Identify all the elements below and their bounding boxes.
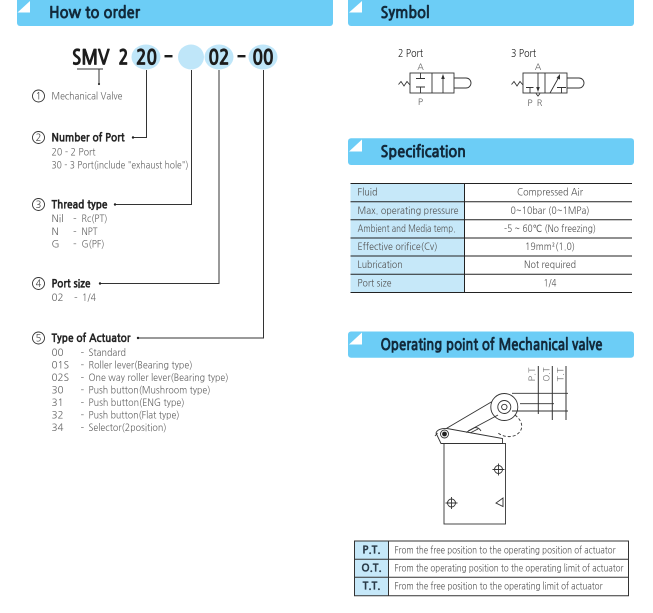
symbol: 2 Port <box>398 48 471 107</box>
item 5: Type of Actuator: Push button(Flat type) <box>88 410 180 420</box>
item 4: Port size <box>32 278 96 303</box>
item 5: Type of Actuator: Push button(ENG type) <box>88 397 184 408</box>
code segment highlights <box>132 44 278 70</box>
item 3: Thread type: G(PF) <box>82 238 104 250</box>
row: Max. operating pressure: 0~10bar (0~1MPa) <box>510 205 590 216</box>
item 3: Thread type: NPT <box>82 227 98 237</box>
valve body <box>444 444 506 524</box>
header: How to order <box>17 0 333 26</box>
symbol: 3 Port: 3 Port <box>511 48 536 59</box>
specification table <box>350 184 632 292</box>
item 5: Type of Actuator: Type of Actuator <box>52 333 131 344</box>
item 5: Type of Actuator: Standard <box>88 347 126 358</box>
item 4: Port size: 4 <box>36 280 42 289</box>
row: Port size: Port size <box>358 278 392 288</box>
item 4: Port size: 1/4 <box>82 293 96 303</box>
row: T.T.: T.T. <box>363 580 380 592</box>
symbol: 3 Port: P <box>527 99 533 108</box>
row: Effective orifice <box>358 241 575 252</box>
item 3: Thread type: G <box>52 240 59 250</box>
item 2: Number of Port: 20 - 2 Port <box>52 148 96 158</box>
code text: 2 <box>118 48 128 68</box>
item 1: Mechanical Valve <box>32 90 123 102</box>
header: Specification: Specification <box>380 144 466 160</box>
item 5: Type of Actuator: 32 <box>52 410 64 420</box>
header: Symbol: Symbol <box>380 5 430 21</box>
item 2: Number of Port: Number of Port <box>52 132 125 144</box>
header: Specification <box>348 138 634 165</box>
row: Effective orifice: Effective orifice(Cv) <box>358 241 438 252</box>
measurement lines <box>512 393 568 411</box>
code text: 00 <box>252 48 274 68</box>
item 4: Port size: 02 <box>52 293 64 303</box>
row: Lubrication: Not required <box>524 259 576 270</box>
item 5: Type of Actuator: 31 <box>52 398 64 408</box>
item 5: Type of Actuator: 02S <box>52 373 69 383</box>
diagram: mechanical valve operating points <box>435 366 568 524</box>
item 2: Number of Port <box>32 132 188 170</box>
item 5: Type of Actuator: - <box>80 423 84 433</box>
label: O.T: O.T <box>542 367 552 382</box>
symbol: 2 Port: P <box>418 98 423 107</box>
item 2: Number of Port: 2 <box>36 134 41 143</box>
row: Lubrication <box>358 259 576 270</box>
item 3: Thread type: Nil <box>52 213 64 224</box>
mounting marks <box>446 464 504 509</box>
row: Port size: 1/4 <box>544 278 556 288</box>
row: Max. operating pressure <box>358 205 590 216</box>
item 3: Thread type: 3 <box>36 201 41 210</box>
item 3: Thread type: Rc(PT) <box>82 213 108 224</box>
row: Ambient and Media temp.: -5 ~ 60℃ (No freezing) <box>504 223 596 234</box>
row: Fluid: Fluid <box>358 186 378 198</box>
item 5: Type of Actuator: - <box>80 398 84 408</box>
row: T.T. <box>363 580 603 592</box>
row: Max. operating pressure: Max. operating pressure <box>358 206 459 216</box>
header: Operating point of Mechanical valve <box>348 332 634 358</box>
label: T.T: T.T <box>556 367 566 382</box>
item 4: Port size: Port size <box>52 278 90 290</box>
label: P.T: P.T <box>528 367 537 382</box>
legend table: travel definitions <box>354 541 628 596</box>
header: Symbol <box>348 0 634 26</box>
item 5: Type of Actuator: - <box>80 360 84 370</box>
code text: SMV <box>72 48 110 68</box>
actuator lever and roller <box>435 394 522 444</box>
item 3: Thread type: - <box>73 240 77 250</box>
item 4: Port size: - <box>74 293 78 303</box>
header: Operating point of Mechanical valve: Operating point of Mechanical valve <box>380 337 603 353</box>
row: T.T.: From the free position to the operating limit of actuator <box>394 580 603 592</box>
item 3: Thread type: N <box>52 227 59 237</box>
row: Effective orifice: 19mm²(1.0) <box>525 241 575 252</box>
item 5: Type of Actuator: Roller lever(Bearing type) <box>88 360 192 370</box>
row: Fluid: Compressed Air <box>517 186 583 198</box>
row: P.T.: P.T. <box>362 544 381 556</box>
code text <box>72 48 274 68</box>
item 5: Type of Actuator: - <box>80 386 84 396</box>
item 1: Mechanical Valve: 1 <box>36 92 41 102</box>
symbol: 2 Port: 2 Port <box>398 48 423 59</box>
item 3: Thread type: Thread type <box>52 200 108 210</box>
item 3: Thread type: - <box>73 227 77 237</box>
item 3: Thread type <box>32 198 108 250</box>
leader lines <box>77 69 264 339</box>
item 5: Type of Actuator: 01S <box>52 360 69 370</box>
item 5: Type of Actuator: 34 <box>52 423 64 433</box>
code text: 02 <box>208 48 230 68</box>
header: How to order: How to order <box>49 5 140 21</box>
symbol: 3 Port <box>511 48 584 108</box>
symbol: 3 Port: R <box>537 99 543 108</box>
row: O.T.: O.T. <box>361 562 382 574</box>
item 5: Type of Actuator: 30 <box>52 386 64 396</box>
item 5: Type of Actuator: - <box>80 373 84 383</box>
item 5: Type of Actuator: - <box>80 348 84 358</box>
symbol: 2 Port: A <box>417 63 424 72</box>
item 5: Type of Actuator: 00 <box>52 348 64 358</box>
item 5: Type of Actuator: Push button(Mushroom type) <box>88 384 210 396</box>
item 1: Mechanical Valve: Mechanical Valve <box>52 90 123 102</box>
row: Ambient and Media temp.: Ambient and Media temp. <box>358 223 456 234</box>
item 5: Type of Actuator: 5 <box>36 334 42 344</box>
row: Port size <box>358 278 556 288</box>
item 5: Type of Actuator <box>32 332 228 433</box>
symbol: 3 Port: A <box>535 63 542 72</box>
item 2: Number of Port: 30 - 3 Port(include "exhaust hole") <box>52 160 188 170</box>
item 3: Thread type: - <box>73 214 77 224</box>
item 5: Type of Actuator: One way roller lever(Bearing type) <box>88 372 228 383</box>
order code <box>72 44 278 70</box>
row: Ambient and Media temp. <box>358 223 596 234</box>
code text: 20 <box>136 48 157 68</box>
item 5: Type of Actuator: Selector(2position) <box>88 422 166 433</box>
item 5: Type of Actuator: - <box>80 410 84 420</box>
row: Lubrication: Lubrication <box>358 259 402 270</box>
row: Fluid <box>358 186 583 198</box>
